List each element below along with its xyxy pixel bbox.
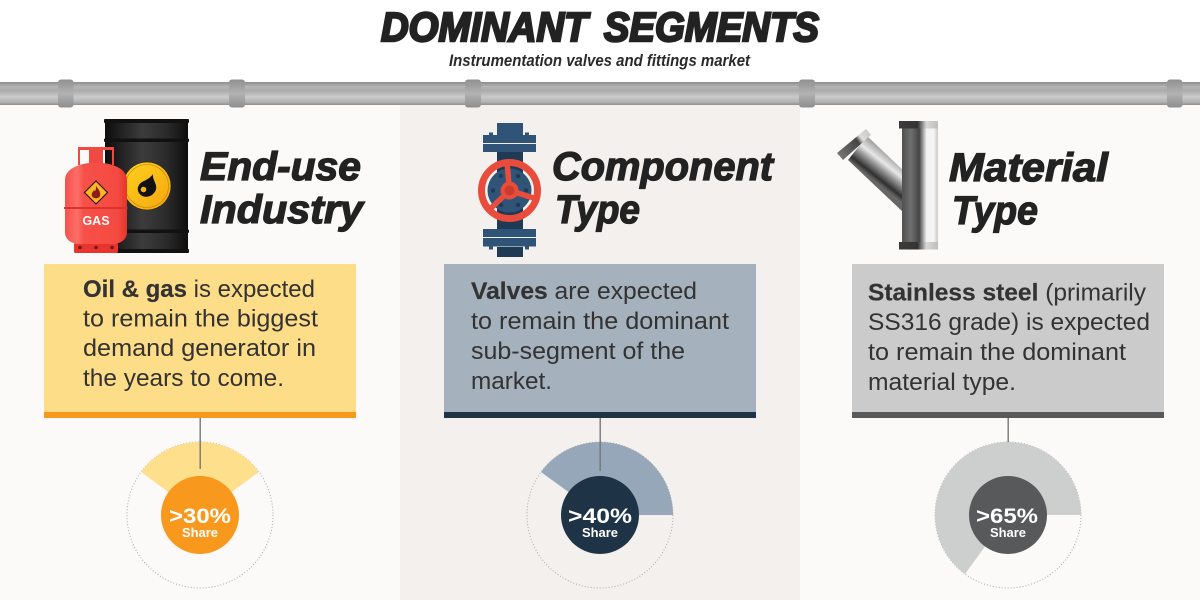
chart: 65% share: Share — [990, 525, 1026, 540]
heading: material type: Material — [949, 146, 1109, 190]
text box: oil and gas: the years to come. — [83, 365, 284, 392]
heading: component type — [552, 145, 775, 232]
panel: material type — [837, 121, 1164, 588]
chart: 65% share: >65% — [976, 505, 1038, 528]
chart: 30% share: >30% — [169, 505, 231, 528]
icon: oil barrel and gas cylinder: GAS — [82, 214, 110, 228]
chart: 30% share: Share — [182, 525, 218, 540]
heading: end-use industry — [200, 145, 365, 232]
text box: stainless steel: SS316 grade) is expected — [868, 309, 1150, 336]
text box: valves: sub-segment of the — [471, 338, 685, 365]
icon: stainless steel Y-fitting — [837, 121, 938, 250]
chart: 30% share — [127, 418, 273, 588]
text box: stainless steel — [852, 264, 1164, 418]
heading: material type — [949, 146, 1109, 233]
chart: 40% share — [527, 418, 673, 588]
heading: end-use industry: Industry — [200, 188, 365, 232]
text box: stainless steel: to remain the dominant — [868, 339, 1126, 366]
chart: 65% share — [935, 418, 1081, 588]
text box: oil and gas: to remain the biggest — [83, 306, 318, 332]
icon: valve — [482, 123, 538, 257]
text box: oil and gas: Oil & gas is expected — [83, 276, 315, 303]
panel: end-use industry — [44, 119, 365, 588]
heading: material type: Type — [952, 189, 1038, 233]
text box: stainless steel: Stainless steel (primarily — [868, 280, 1147, 306]
text box: stainless steel: material type. — [868, 369, 1016, 396]
title: DOMINANT SEGMENTS — [381, 4, 819, 50]
heading: component type: Type — [555, 188, 640, 232]
panel: component type — [444, 123, 775, 588]
text box: valves: to remain the dominant — [471, 308, 729, 335]
chart: 40% share: Share — [582, 525, 618, 540]
text box: oil and gas: demand generator in — [83, 335, 316, 362]
chart: 40% share: >40% — [568, 505, 632, 528]
pipe — [0, 80, 1200, 108]
text box: valves: market. — [471, 368, 552, 395]
text box: valves — [444, 264, 756, 418]
icon: oil barrel and gas cylinder — [64, 119, 189, 253]
text box: valves: Valves are expected — [471, 278, 697, 305]
heading: end-use industry: End-use — [200, 145, 361, 189]
subtitle: Instrumentation valves and fittings market — [449, 51, 751, 70]
text box: oil and gas — [44, 264, 356, 418]
heading: component type: Component — [552, 145, 775, 189]
